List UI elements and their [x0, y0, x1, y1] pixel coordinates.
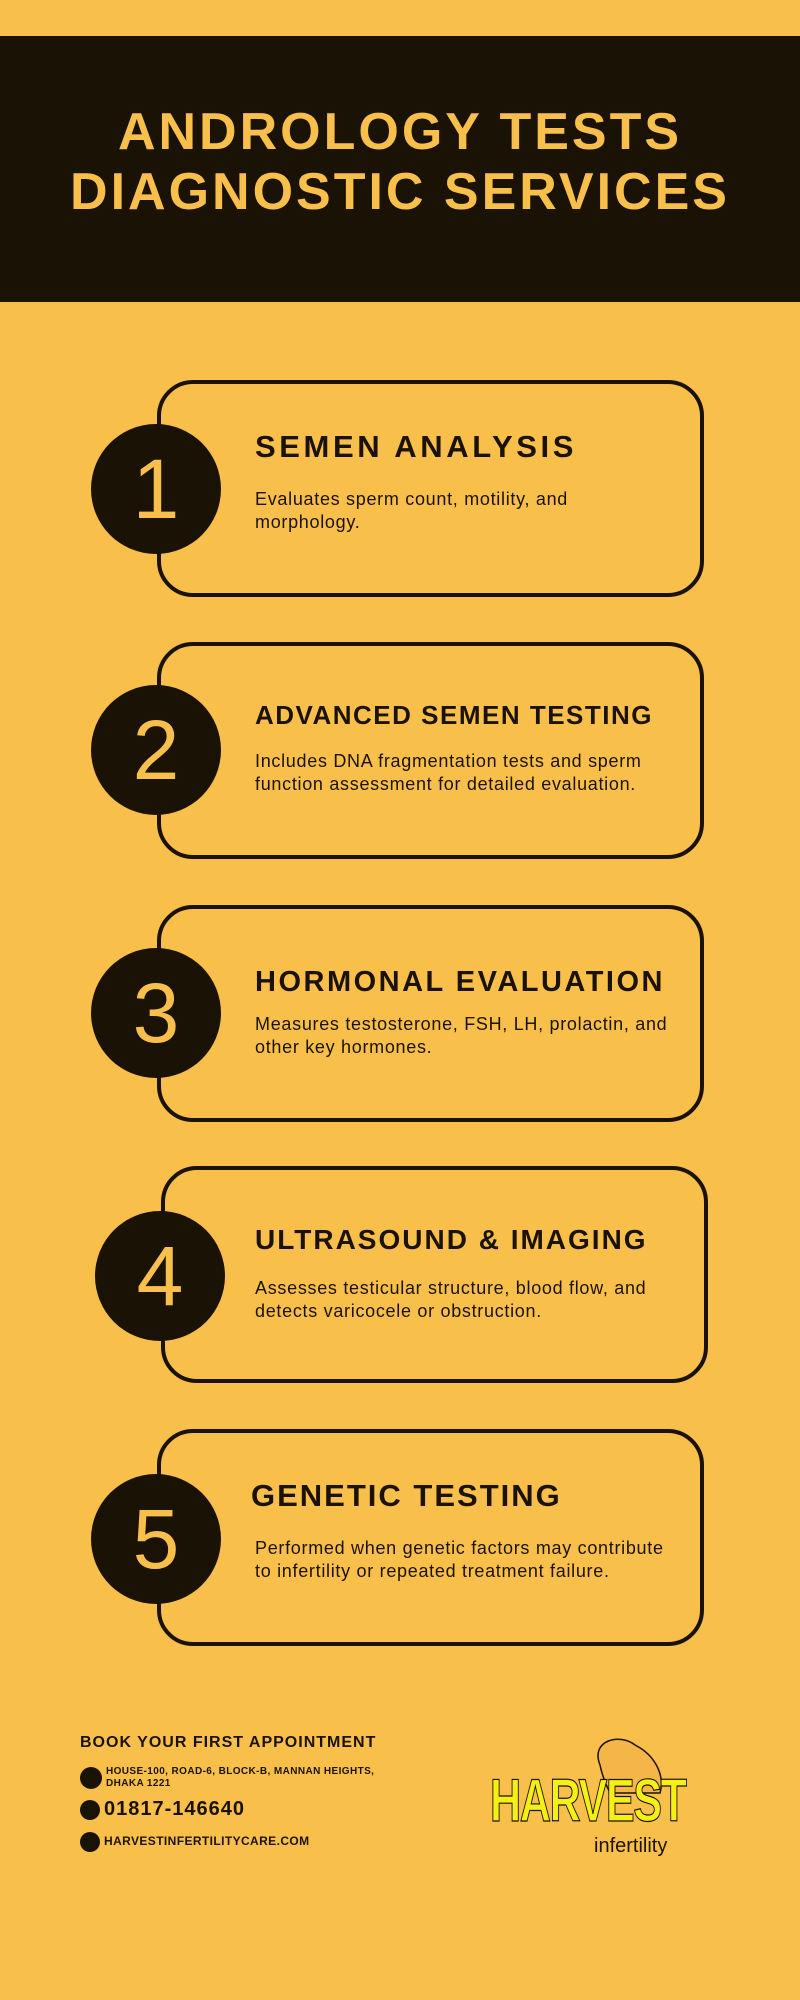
phone: 01817-146640	[104, 1798, 245, 1820]
title 2: ADVANCED SEMEN TESTING	[255, 700, 653, 730]
desc 5: Performed when genetic factors may contribute	[255, 1538, 664, 1558]
card 5	[157, 1429, 704, 1646]
title 3: HORMONAL EVALUATION	[255, 966, 665, 998]
header	[0, 36, 800, 302]
title: DIAGNOSTIC SERVICES	[70, 163, 730, 221]
number 3	[91, 948, 221, 1078]
title: ANDROLOGY TESTS	[118, 103, 682, 161]
desc 4: Assesses testicular structure, blood flow, and	[255, 1278, 646, 1298]
desc 1: Evaluates sperm count, motility, and	[255, 489, 568, 509]
title 1: SEMEN ANALYSIS	[255, 429, 577, 464]
desc 5: to infertility or repeated treatment failure.	[255, 1561, 610, 1581]
desc 5	[255, 1538, 664, 1581]
desc 2: function assessment for detailed evaluation.	[255, 774, 636, 794]
title 4: ULTRASOUND & IMAGING	[255, 1224, 648, 1255]
address	[80, 1766, 374, 1789]
book heading: BOOK YOUR FIRST APPOINTMENT	[80, 1734, 376, 1751]
desc 1: morphology.	[255, 512, 360, 532]
number 2	[91, 685, 221, 815]
icon: baby	[597, 1738, 662, 1794]
card 2	[157, 642, 704, 859]
card 1	[157, 380, 704, 597]
address: DHAKA 1221	[106, 1778, 171, 1789]
card 3	[157, 905, 704, 1122]
title	[70, 103, 730, 221]
desc 4: detects varicocele or obstruction.	[255, 1301, 542, 1321]
number 4	[95, 1211, 225, 1341]
website: HARVESTINFERTILITYCARE.COM	[104, 1834, 310, 1848]
number 5: 5	[133, 1492, 179, 1586]
tagline: infertility	[594, 1835, 667, 1857]
number 4: 4	[137, 1229, 183, 1323]
number 1	[91, 424, 221, 554]
desc 2: Includes DNA fragmentation tests and sperm	[255, 751, 642, 771]
title 5: GENETIC TESTING	[251, 1478, 562, 1513]
number 3: 3	[133, 966, 179, 1060]
desc 1	[255, 489, 568, 532]
number 2: 2	[133, 703, 179, 797]
number 5	[91, 1474, 221, 1604]
card 4	[161, 1166, 708, 1383]
desc 3: other key hormones.	[255, 1037, 432, 1057]
desc 2	[255, 751, 642, 794]
footer contact	[80, 1734, 376, 1852]
number 1: 1	[133, 442, 179, 536]
logo	[490, 1738, 687, 1857]
desc 3: Measures testosterone, FSH, LH, prolactin, and	[255, 1014, 667, 1034]
address: HOUSE-100, ROAD-6, BLOCK-B, MANNAN HEIGHTS,	[106, 1766, 374, 1777]
desc 4	[255, 1278, 646, 1321]
logo text: HARVEST	[490, 1767, 686, 1834]
website	[80, 1832, 310, 1852]
desc 3	[255, 1014, 667, 1057]
